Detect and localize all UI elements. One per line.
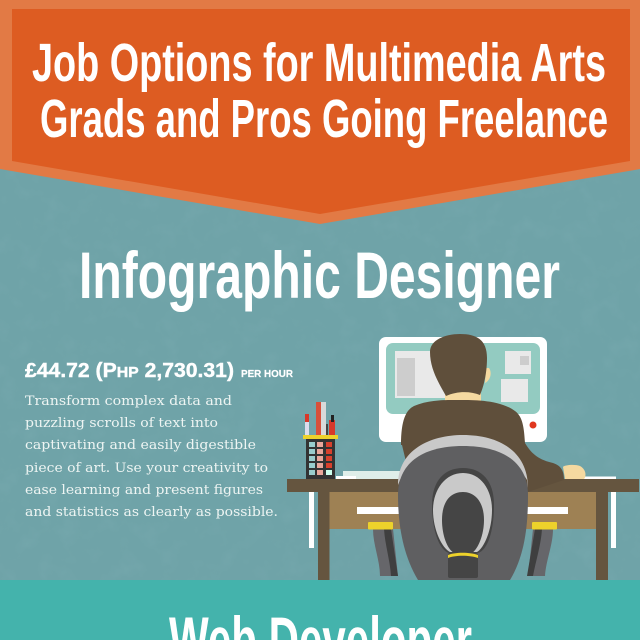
- icon: chair legs and armrests: [368, 522, 557, 576]
- icon: office chair: [398, 435, 528, 580]
- text block: job description: piece of art. Use your creativity to: [25, 461, 268, 476]
- rate: hourly pay: PER HOUR: [241, 369, 294, 380]
- icon: designer from behind: [401, 334, 585, 520]
- panel: web developer section: [0, 580, 640, 640]
- rate: hourly pay: £44.72 (P HP 2,730.31): [25, 360, 234, 382]
- text block: job description: captivating and easily digestible: [25, 438, 256, 453]
- text block: job description: [25, 394, 278, 520]
- icon: pen holder: [303, 402, 338, 479]
- text block: job description: and statistics as clearly as possible.: [25, 505, 278, 520]
- banner: title ribbon: [0, 0, 640, 224]
- text block: job description: puzzling scrolls of text into: [25, 416, 218, 431]
- text block: job description: ease learning and present figures: [25, 483, 263, 498]
- icon: desk: [287, 479, 639, 580]
- illustration: designer at desk: [287, 334, 639, 580]
- icon: keyboard and mouse pad: [336, 471, 616, 479]
- title: [32, 33, 608, 149]
- icon: computer monitor: [379, 337, 547, 442]
- text block: job description: Transform complex data and: [25, 394, 232, 409]
